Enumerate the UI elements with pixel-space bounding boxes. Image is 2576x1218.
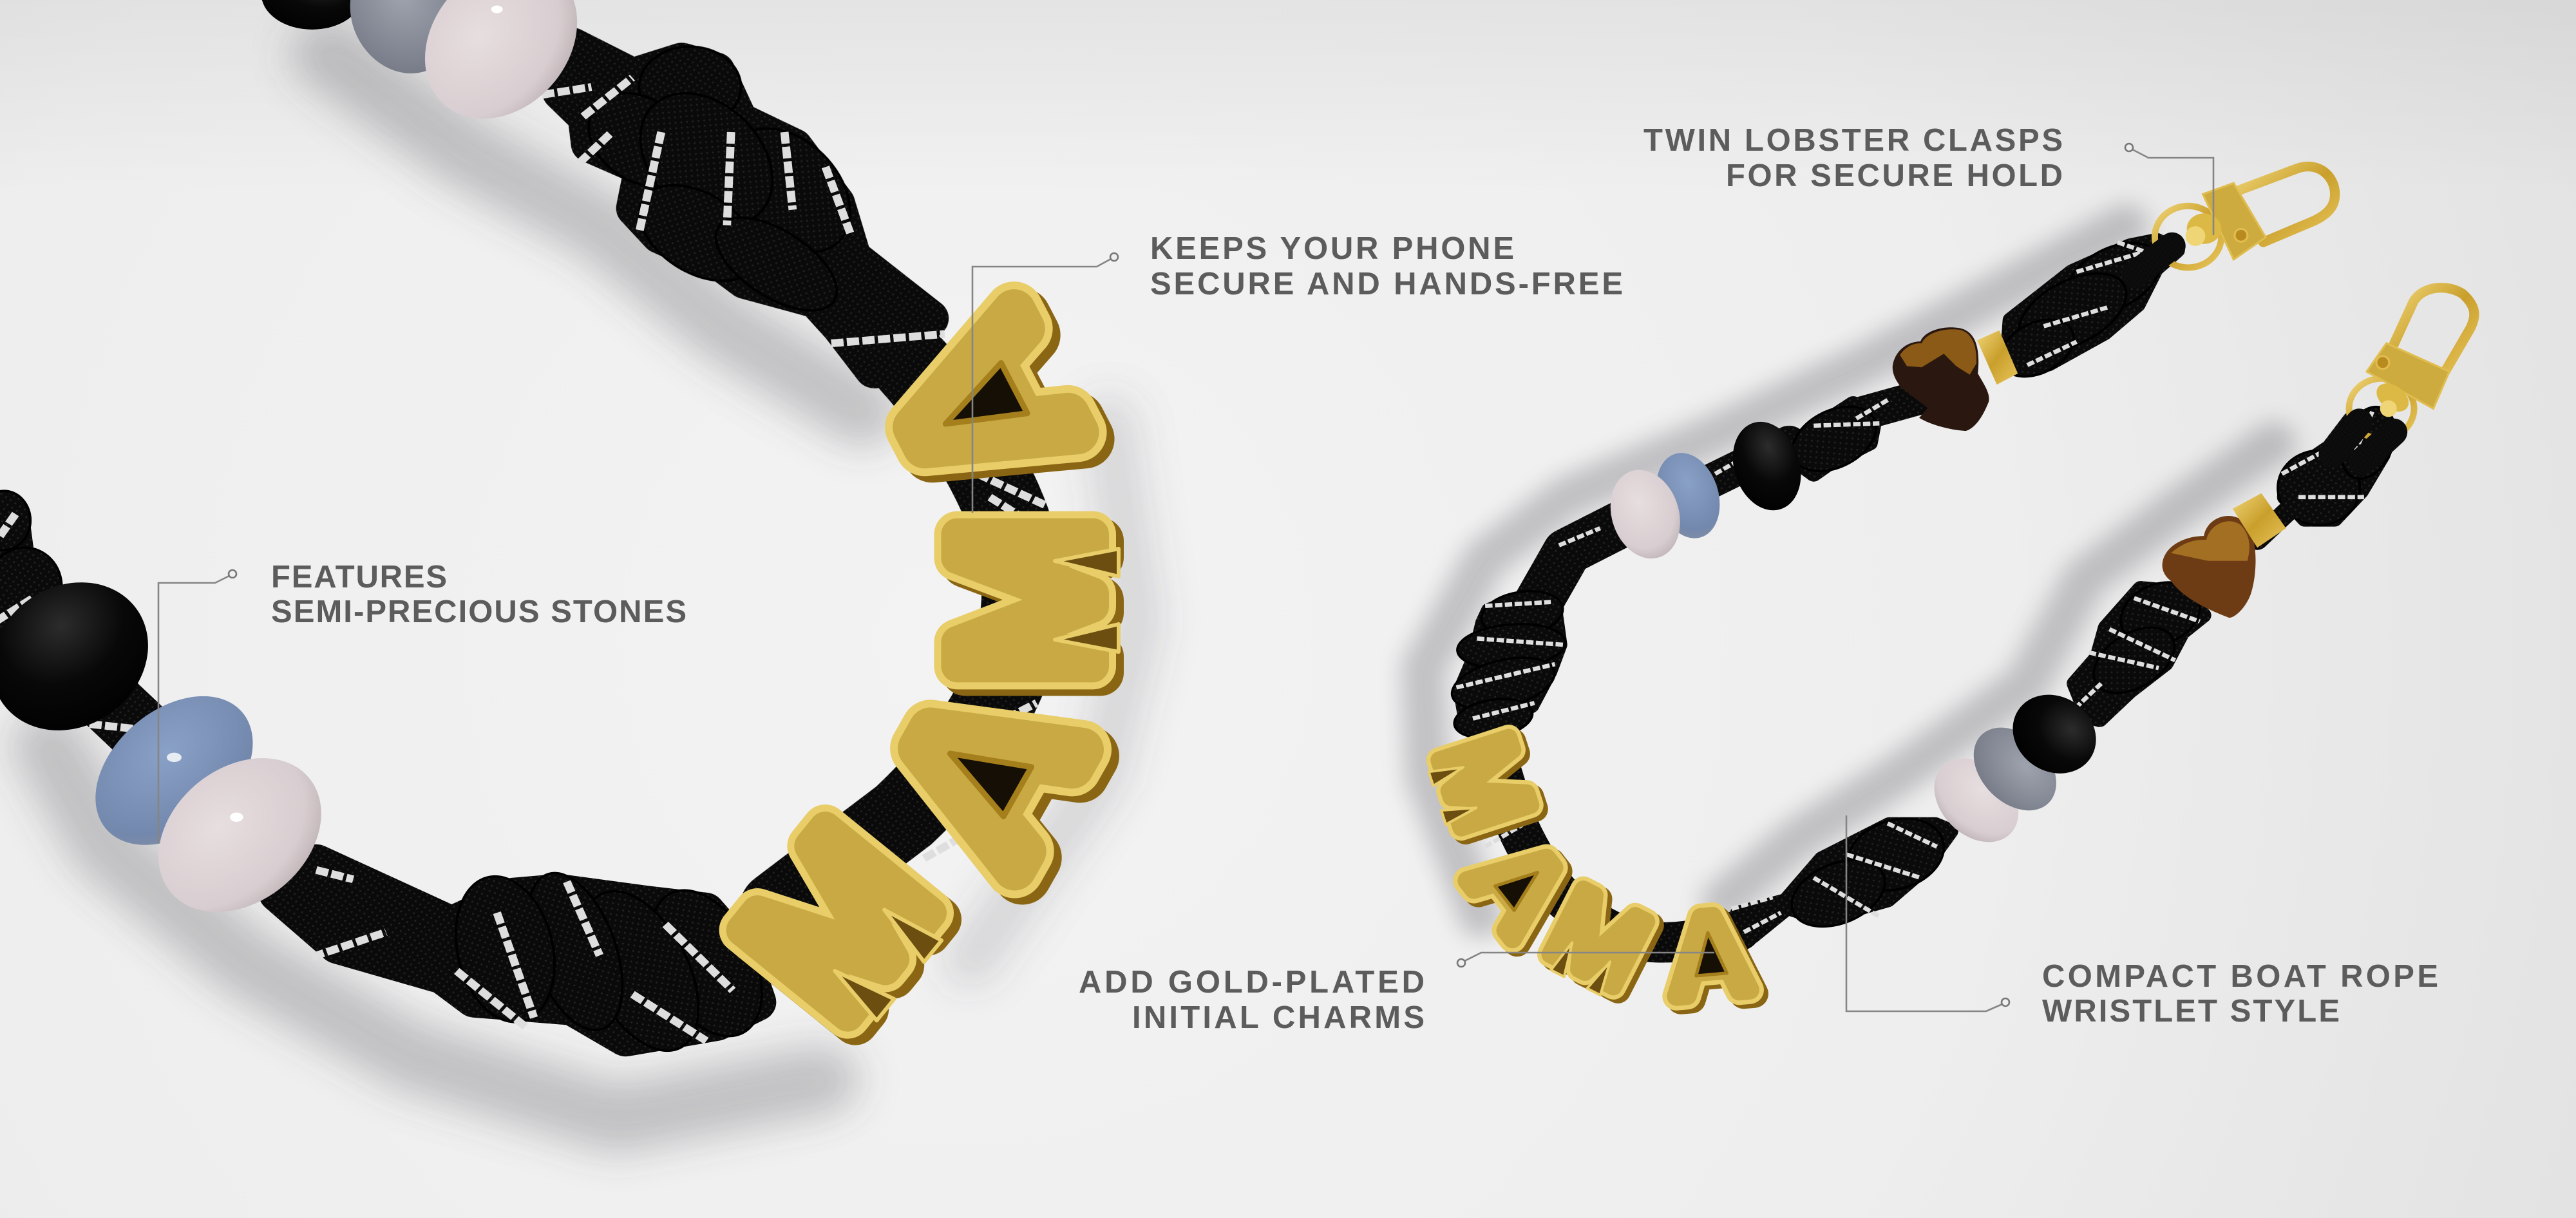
label: twin lobster clasps: FOR SECURE HOLD [1726,158,2063,193]
knot: lower right [2075,571,2211,719]
charm: small letter M third: M [1537,869,1669,1014]
charm: small letter M third: M [1532,865,1665,1011]
clasp: bottom [2332,288,2474,462]
label: twin lobster clasps: TWIN LOBSTER CLASPS [1643,123,2063,158]
charm: small letter M first: M [1415,722,1555,843]
leader: semi-precious stones [158,570,236,843]
charm: small letter A second: A [1453,823,1596,958]
bead: lower black [1996,679,2113,790]
leader: keeps your phone secure [972,253,1118,513]
left bracelet close-up [0,0,1138,1119]
label: keeps your phone secure: KEEPS YOUR PHONE [1150,231,1514,266]
charm: large letter A lower: A [860,663,1128,897]
rope: heart to knot connector [2257,505,2294,540]
label: compact boat rope: WRISTLET STYLE [2042,994,2340,1029]
charm: large letter A lower: A [852,656,1121,891]
label: twin lobster clasps [1643,123,2063,193]
stone: upper tiger eye heart [1893,327,2018,431]
right wristlet [1423,225,2405,942]
bead: top black [1723,415,1811,518]
charm: small letter A fourth: A [1667,890,1752,1020]
knot: far left rope [0,491,62,652]
label: keeps your phone secure: SECURE AND HANDS-FREE [1150,267,1623,301]
bead: blue stone [65,667,283,874]
bead: top rose quartz [393,0,609,147]
knot: near second clasp [2278,400,2405,525]
stone: lower tiger eye heart [2163,516,2256,618]
bead: rose quartz [126,727,354,943]
charm: large letter A top: A [855,296,1124,526]
knot: after charms [1738,806,1955,940]
rope: cord to second knot [1539,524,1621,602]
charm: small letter M first: M [1419,726,1560,847]
knot: left side [1446,585,1567,743]
rope stripes [0,78,1045,1041]
label: semi-precious stones [271,560,687,629]
clasps [2135,167,2474,462]
rope between black and blue bead [90,683,173,761]
charm: large letter M upper: M [914,519,1135,682]
charm: large letter M lower: M [699,788,973,1054]
cast shadow: left bracelet [50,54,1138,1119]
charm: large letter M upper: M [922,525,1142,689]
bead: top grey stone [333,0,475,88]
charm: large letter M upper: M [914,519,1135,682]
gold tube: upper [1977,330,2018,385]
knot: near top clasp [1990,229,2177,388]
label: semi-precious stones: SEMI-PRECIOUS STONES [271,595,687,629]
bead: lower rose quartz [1917,743,2036,858]
charm: small letter M first: M [1415,722,1555,843]
rope stripes [1456,242,2372,932]
bead: lower grey [1957,712,2073,826]
knot: upper left rope [563,46,928,369]
rope: wristlet main cord [1489,738,1739,942]
knot: after black bead [1780,394,1888,484]
bead: top rose quartz [1600,462,1690,566]
rope: top cord [1707,396,1925,483]
charm: large letter M lower: M [699,788,973,1054]
charm: large letter M lower: M [706,795,981,1061]
bead: top blue [1647,446,1729,545]
charm: small letter A fourth: A [1667,890,1752,1020]
charm: large letter A top: A [848,290,1116,519]
label: gold-plated charms: INITIAL CHARMS [1132,1000,1425,1035]
cast shadow: wristlet [1423,225,2274,917]
label: compact boat rope [2042,959,2438,1029]
charm: large letter A lower: A [852,656,1121,891]
knot: lower rope [279,862,784,1067]
charm: large letter A top: A [848,290,1116,519]
rope behind charms [781,365,1023,909]
leader: gold-plated charms [1457,953,1714,967]
bead: top black stone [261,0,363,30]
label: compact boat rope: COMPACT BOAT ROPE [2042,959,2438,994]
label: gold-plated charms [1079,965,1425,1035]
leader: compact boat rope [1846,815,2009,1011]
charm: small letter M third: M [1532,865,1665,1011]
clasp: top [2135,167,2335,274]
label: semi-precious stones: FEATURES [271,560,447,595]
charm: small letter A second: A [1448,819,1591,954]
leader: twin lobster clasps [2125,144,2213,235]
gold tube: lower [2233,493,2286,547]
bead: black stone [0,552,180,761]
charm: small letter A fourth: A [1672,894,1757,1024]
label: keeps your phone secure [1150,231,1623,301]
charm: small letter A second: A [1448,819,1591,954]
label: gold-plated charms: ADD GOLD-PLATED [1079,965,1425,1000]
